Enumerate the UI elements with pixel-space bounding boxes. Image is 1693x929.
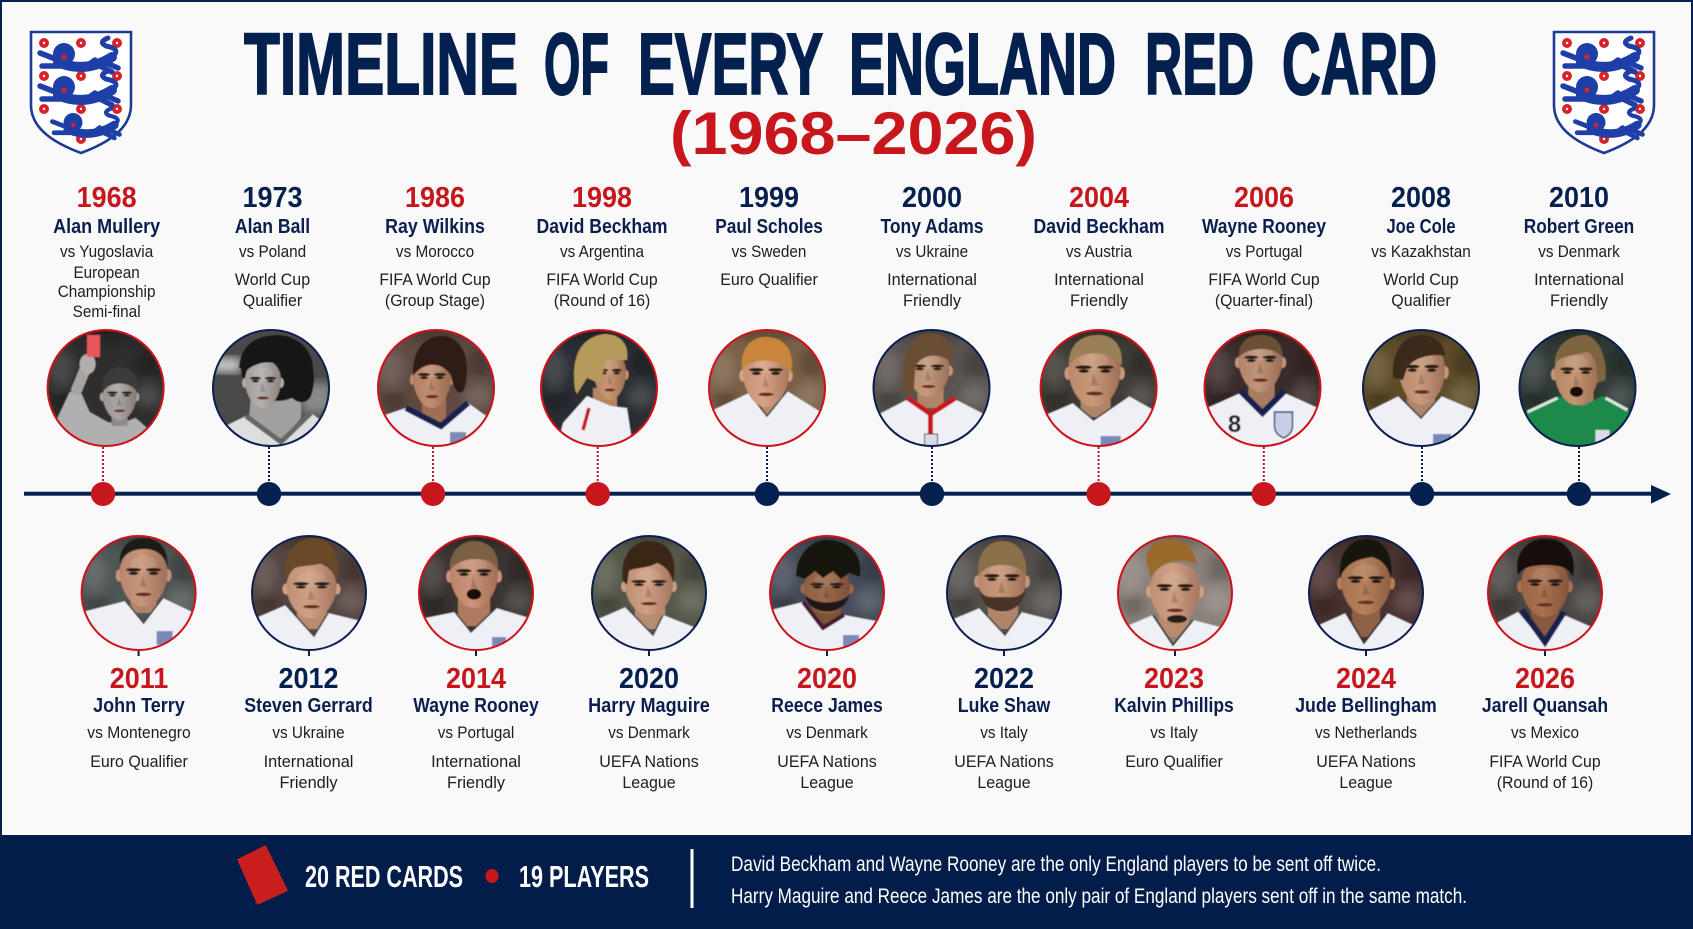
portrait: Tony Adams bbox=[872, 329, 990, 447]
entry: 2014 Wayne Rooney bbox=[413, 523, 539, 792]
fact line one: David Beckham and Wayne Rooney are the only England players to be sent off twice. bbox=[731, 853, 1381, 876]
text: 2012 details: Friendly bbox=[279, 773, 338, 792]
title: EVERY bbox=[638, 15, 823, 113]
text: 2000 details: Tony Adams bbox=[880, 215, 984, 237]
text: 2010 details: 2010 bbox=[1549, 181, 1609, 213]
text: 1986 details: (Group Stage) bbox=[385, 292, 485, 310]
text: 2004 details: International bbox=[1054, 270, 1144, 289]
text: 2011 details bbox=[87, 662, 191, 771]
text: 2012 details: 2012 bbox=[279, 662, 338, 694]
entry: 2024 Jude Bellingham bbox=[1295, 523, 1437, 792]
text: 1986 details: Ray Wilkins bbox=[385, 216, 485, 238]
marker: 2008 bbox=[1410, 482, 1434, 506]
text: 2022 details: UEFA Nations bbox=[954, 753, 1054, 771]
text: 1999 details: vs Sweden bbox=[732, 242, 806, 261]
text: 2022 details bbox=[954, 662, 1054, 792]
connector: 2010 bbox=[1578, 447, 1580, 482]
text: 1968 details: Semi-final bbox=[73, 302, 141, 321]
text: 2020 James details: UEFA Nations bbox=[777, 753, 877, 771]
portrait: Joe Cole bbox=[1362, 329, 1480, 447]
connector: 2004 bbox=[1098, 447, 1100, 482]
text: 2022 details: League bbox=[977, 774, 1031, 792]
text: 2008 details: World Cup bbox=[1383, 271, 1459, 289]
text: 1968 details: 1968 bbox=[77, 181, 137, 213]
text: 2014 details bbox=[413, 662, 539, 792]
connector tick: 2014 bbox=[475, 651, 477, 656]
text: 1998 details: (Round of 16) bbox=[554, 292, 650, 310]
entry: 2022 Luke Shaw bbox=[944, 523, 1064, 792]
text: 2020 James details: 2020 bbox=[797, 662, 857, 694]
text: 1998 details: vs Argentina bbox=[560, 242, 644, 261]
text: 2014 details: 2014 bbox=[446, 662, 506, 694]
text: 2020 James details bbox=[771, 662, 883, 792]
portrait: David Beckham 2004 bbox=[1040, 329, 1158, 447]
portrait: Luke Shaw bbox=[946, 535, 1062, 651]
icon: red card bbox=[239, 847, 286, 903]
marker: 2000 bbox=[920, 482, 944, 506]
marker: 1986 bbox=[421, 482, 445, 506]
text: 2023 details: Euro Qualifier bbox=[1125, 753, 1223, 771]
entry: 2020 Harry Maguire bbox=[588, 523, 710, 792]
text: 2000 details: Friendly bbox=[903, 291, 962, 310]
text: 2014 details: vs Portugal bbox=[438, 723, 514, 742]
icon: England crest right bbox=[1554, 32, 1654, 153]
text: 2008 details: vs Kazakhstan bbox=[1371, 242, 1471, 261]
text: 2014 details: Friendly bbox=[447, 773, 506, 792]
text: 2020 James details: Reece James bbox=[771, 694, 883, 716]
connector: 1986 bbox=[432, 447, 434, 482]
text: 2026 details: (Round of 16) bbox=[1497, 774, 1593, 792]
portrait: Robert Green bbox=[1518, 329, 1636, 447]
text: 2010 details bbox=[1524, 181, 1634, 310]
text: 2020 Maguire details bbox=[588, 662, 710, 792]
entry: 2008 Joe Cole bbox=[1361, 181, 1481, 506]
stat: 20 red cards: 20 RED CARDS bbox=[305, 859, 463, 894]
connector tick: 2026 bbox=[1544, 651, 1546, 656]
title: TIMELINE bbox=[244, 15, 518, 113]
entry: 1998 David Beckham bbox=[536, 181, 668, 506]
marker: 1999 bbox=[755, 482, 779, 506]
text: 1986 details bbox=[379, 181, 491, 310]
text: 1973 details: Qualifier bbox=[243, 292, 303, 310]
text: 2006 details: 2006 bbox=[1234, 181, 1294, 213]
entry: 2026 Jarell Quansah bbox=[1482, 523, 1608, 792]
stat: 19 players: 19 PLAYERS bbox=[519, 859, 649, 894]
text: 1968 details: Alan Mullery bbox=[53, 216, 160, 238]
marker: 2010 bbox=[1567, 482, 1591, 506]
text: 2004 details: David Beckham bbox=[1033, 215, 1165, 237]
text: 2023 details bbox=[1114, 662, 1234, 771]
text: 2012 details: International bbox=[264, 752, 353, 771]
timeline axis with arrow bbox=[24, 485, 1671, 504]
entry: 1986 Ray Wilkins bbox=[376, 181, 496, 506]
text: 2014 details: International bbox=[431, 752, 521, 771]
text: 1998 details bbox=[536, 181, 668, 310]
text: 2024 details: Jude Bellingham bbox=[1295, 695, 1437, 717]
text: 2024 details bbox=[1295, 662, 1437, 792]
text: 2008 details bbox=[1371, 181, 1471, 310]
entry: 2000 Tony Adams bbox=[872, 181, 992, 506]
marker: 2006 bbox=[1252, 482, 1276, 506]
portrait: Alan Mullery bbox=[47, 318, 164, 448]
text: 2011 details: John Terry bbox=[93, 695, 185, 717]
text: 2012 details: vs Ukraine bbox=[272, 723, 345, 742]
portrait: Wayne Rooney 2006 bbox=[1204, 329, 1322, 447]
text: 2026 details: FIFA World Cup bbox=[1489, 753, 1601, 771]
divider bbox=[690, 849, 694, 908]
connector tick: 2020 James bbox=[826, 651, 828, 656]
text: 2006 details: FIFA World Cup bbox=[1208, 271, 1320, 289]
text: 1999 details: Euro Qualifier bbox=[720, 271, 818, 289]
text: 2004 details: Friendly bbox=[1070, 291, 1129, 310]
text: 2020 Maguire details: Harry Maguire bbox=[588, 695, 710, 717]
text: 2000 details: 2000 bbox=[902, 181, 962, 213]
connector tick: 2024 bbox=[1365, 651, 1367, 656]
marker: 1998 bbox=[586, 482, 610, 506]
text: 1986 details: FIFA World Cup bbox=[379, 271, 491, 289]
text: 2010 details: International bbox=[1534, 270, 1624, 289]
separator dot bbox=[486, 869, 498, 883]
marker: 1973 bbox=[257, 482, 281, 506]
connector tick: 2011 bbox=[138, 651, 140, 656]
text: 1968 details bbox=[53, 181, 160, 321]
portrait: Ray Wilkins bbox=[377, 329, 495, 447]
text: 2024 details: League bbox=[1339, 774, 1393, 792]
marker: 1968 bbox=[91, 482, 115, 506]
portrait: Harry Maguire bbox=[591, 535, 707, 651]
text: 1998 details: 1998 bbox=[572, 181, 632, 213]
text: 1973 details: 1973 bbox=[243, 181, 302, 213]
text: 2000 details: International bbox=[887, 270, 977, 289]
text: 2022 details: vs Italy bbox=[980, 723, 1029, 742]
subtitle: (1968–2026) bbox=[670, 100, 1037, 167]
connector tick: 2012 bbox=[308, 651, 310, 656]
connector: 2006 bbox=[1263, 447, 1265, 482]
text: 2008 details: Joe Cole bbox=[1386, 215, 1456, 237]
connector tick: 2022 bbox=[1003, 651, 1005, 656]
text: 1986 details: 1986 bbox=[405, 181, 465, 213]
text: 2024 details: UEFA Nations bbox=[1316, 753, 1416, 771]
text: 2010 details: Robert Green bbox=[1524, 215, 1634, 237]
text: 2004 details bbox=[1033, 181, 1165, 310]
text: 2026 details: vs Mexico bbox=[1511, 723, 1579, 742]
text: 2004 details: vs Austria bbox=[1066, 242, 1132, 261]
text: 2020 James details: League bbox=[800, 774, 854, 792]
text: 2022 details: Luke Shaw bbox=[958, 695, 1050, 717]
icon: England crest left bbox=[31, 32, 131, 153]
portrait: Paul Scholes bbox=[708, 329, 826, 447]
entry: 2004 David Beckham bbox=[1033, 181, 1165, 506]
entry: 2023 Kalvin Phillips bbox=[1114, 523, 1235, 771]
entry: 2010 Robert Green bbox=[1518, 181, 1638, 506]
text: 2010 details: Friendly bbox=[1550, 291, 1609, 310]
connector tick: 2020 Maguire bbox=[648, 651, 650, 656]
text: 1999 details: 1999 bbox=[739, 181, 799, 213]
text: 2026 details: Jarell Quansah bbox=[1482, 694, 1608, 716]
text: 2008 details: 2008 bbox=[1391, 181, 1451, 213]
text: 1973 details: Alan Ball bbox=[235, 215, 310, 237]
text: 2020 James details: vs Denmark bbox=[786, 723, 869, 742]
text: 1968 details: Championship bbox=[58, 282, 155, 301]
text: 1998 details: David Beckham bbox=[536, 215, 668, 237]
portrait: Wayne Rooney 2006: 8 bbox=[1228, 411, 1241, 438]
entry: 1999 Paul Scholes bbox=[707, 181, 827, 506]
entry: 1973 Alan Ball bbox=[211, 181, 331, 506]
text: 2026 details bbox=[1482, 662, 1608, 792]
connector: 1973 bbox=[268, 447, 270, 482]
text: 2022 details: 2022 bbox=[974, 662, 1034, 694]
portrait: Wayne Rooney 2014 bbox=[418, 535, 534, 651]
connector: 1968 bbox=[102, 447, 104, 482]
marker: 2004 bbox=[1086, 482, 1111, 506]
text: 2020 Maguire details: UEFA Nations bbox=[599, 753, 699, 771]
title: CARD bbox=[1282, 15, 1437, 113]
text: 2014 details: Wayne Rooney bbox=[413, 694, 539, 716]
text: 2012 details bbox=[244, 662, 373, 792]
portrait: Steven Gerrard bbox=[251, 535, 367, 651]
text: 2000 details: vs Ukraine bbox=[896, 242, 968, 261]
text: 1973 details bbox=[235, 181, 310, 310]
entry: 2006 Wayne Rooney bbox=[1202, 181, 1327, 506]
title bbox=[244, 15, 1437, 113]
portrait: Kalvin Phillips bbox=[1117, 535, 1233, 651]
text: 2023 details: vs Italy bbox=[1150, 723, 1199, 742]
text: 2012 details: Steven Gerrard bbox=[244, 695, 373, 717]
text: 1973 details: vs Poland bbox=[239, 242, 306, 261]
text: 2000 details bbox=[880, 181, 984, 310]
text: 2024 details: vs Netherlands bbox=[1315, 723, 1417, 742]
text: 2006 details: vs Portugal bbox=[1226, 242, 1302, 261]
entry: 2012 Steven Gerrard bbox=[244, 523, 373, 792]
text: 1999 details: Paul Scholes bbox=[715, 215, 823, 237]
portrait: Alan Ball bbox=[211, 330, 331, 448]
text: 1973 details: World Cup bbox=[235, 271, 310, 289]
portrait: Reece James bbox=[769, 535, 885, 651]
text: 1968 details: vs Yugoslavia bbox=[60, 242, 153, 261]
text: 2006 details bbox=[1202, 181, 1327, 310]
text: 1998 details: FIFA World Cup bbox=[546, 271, 658, 289]
text: 2020 Maguire details: vs Denmark bbox=[608, 723, 691, 742]
connector: 2000 bbox=[931, 447, 933, 482]
text: 2004 details: 2004 bbox=[1069, 181, 1129, 213]
portrait: John Terry bbox=[80, 535, 197, 651]
text: 2023 details: 2023 bbox=[1144, 662, 1204, 694]
text: 1999 details bbox=[715, 181, 823, 289]
connector: 1999 bbox=[766, 447, 768, 482]
text: 2008 details: Qualifier bbox=[1391, 292, 1451, 310]
text: 2006 details: Wayne Rooney bbox=[1202, 215, 1327, 237]
text: 1968 details: European bbox=[73, 263, 140, 282]
fact line two: Harry Maguire and Reece James are the only pair of England players sent off in the same match. bbox=[731, 885, 1467, 908]
text: 2023 details: Kalvin Phillips bbox=[1114, 694, 1234, 716]
entry: 1968 Alan Mullery bbox=[47, 181, 164, 506]
text: 2024 details: 2024 bbox=[1336, 662, 1396, 694]
text: 2026 details: 2026 bbox=[1515, 662, 1575, 694]
text: 2020 Maguire details: 2020 bbox=[619, 662, 679, 694]
entry: 2020 Reece James bbox=[767, 523, 887, 792]
text: 2020 Maguire details: League bbox=[622, 774, 676, 792]
text: 2006 details: (Quarter-final) bbox=[1215, 292, 1313, 310]
footer band bbox=[0, 835, 1693, 929]
text: 2010 details: vs Denmark bbox=[1538, 242, 1621, 261]
portrait: Jarell Quansah bbox=[1487, 535, 1603, 651]
text: 2011 details: 2011 bbox=[110, 662, 168, 694]
text: 2011 details: vs Montenegro bbox=[87, 723, 191, 742]
connector tick: 2023 bbox=[1174, 651, 1176, 656]
portrait: Jude Bellingham bbox=[1308, 535, 1424, 651]
entry: 2011 John Terry bbox=[79, 523, 199, 771]
text: 2011 details: Euro Qualifier bbox=[90, 753, 188, 771]
connector: 2008 bbox=[1421, 447, 1423, 482]
title: ENGLAND bbox=[849, 15, 1116, 113]
title: RED bbox=[1145, 15, 1254, 113]
portrait: David Beckham 1998 bbox=[540, 318, 657, 448]
connector: 1998 bbox=[597, 447, 599, 482]
text: 1986 details: vs Morocco bbox=[396, 242, 474, 261]
title: OF bbox=[544, 15, 609, 113]
